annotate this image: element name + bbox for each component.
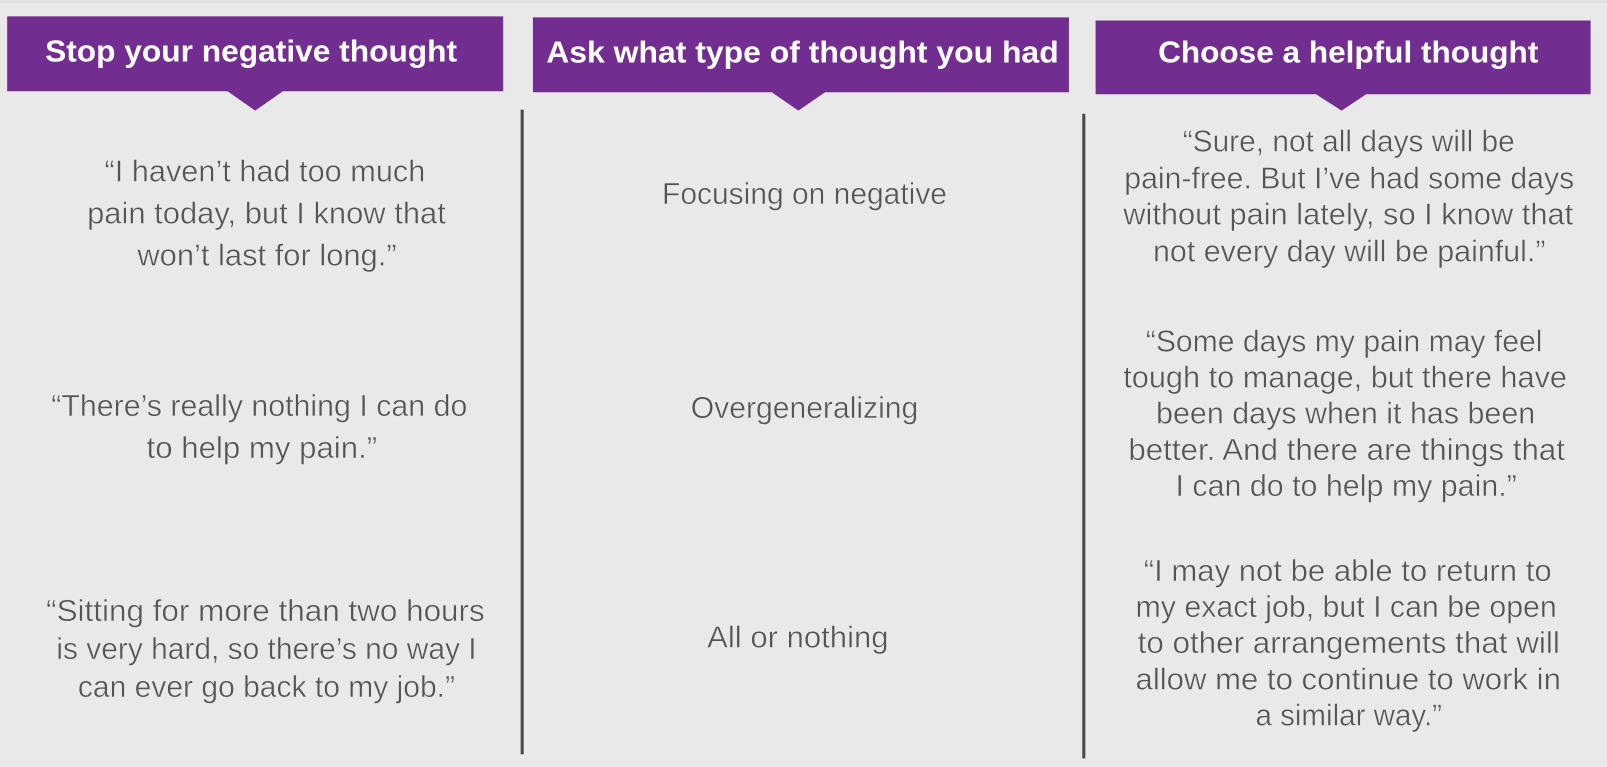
negative thought 2: “There’s really nothing I can do — [51, 388, 467, 423]
negative thought 3: is very hard, so there’s no way I — [56, 631, 477, 666]
helpful thought 3: allow me to continue to work in — [1136, 662, 1561, 697]
helpful thought 3: a similar way.” — [1255, 698, 1442, 733]
header: stop your negative thought: Stop your negative thought — [45, 33, 457, 68]
column divider left — [521, 110, 524, 754]
helpful thought 1: not every day will be painful.” — [1153, 233, 1546, 268]
helpful thought 3: “I may not be able to return to — [1144, 553, 1552, 588]
negative thought 2 — [51, 388, 467, 465]
negative thought 1 — [87, 153, 446, 272]
thought type 1: Focusing on negative — [662, 176, 947, 211]
header: choose a helpful thought — [1096, 20, 1591, 111]
thought type 2: Overgeneralizing — [691, 390, 918, 425]
helpful thought 1: pain-free. But I’ve had some days — [1124, 161, 1574, 196]
helpful thought 3 — [1136, 553, 1561, 733]
helpful thought 2: better. And there are things that — [1128, 432, 1565, 467]
header: choose a helpful thought: Choose a helpful thought — [1158, 35, 1538, 70]
negative thought 1: pain today, but I know that — [87, 195, 446, 230]
helpful thought 2: “Some days my pain may feel — [1146, 324, 1542, 359]
negative thought 1: won’t last for long.” — [136, 237, 397, 272]
column divider right — [1082, 114, 1085, 758]
helpful thought 2: tough to manage, but there have — [1123, 359, 1567, 394]
helpful thought 2: I can do to help my pain.” — [1176, 468, 1517, 503]
thought type 3: All or nothing — [707, 620, 889, 655]
negative thought 1: “I haven’t had too much — [105, 153, 425, 188]
helpful thought 1: without pain lately, so I know that — [1122, 196, 1574, 231]
helpful thought 3: to other arrangements that will — [1138, 625, 1560, 660]
header: stop your negative thought — [7, 16, 503, 111]
helpful thought 1: “Sure, not all days will be — [1183, 124, 1515, 159]
negative thought 3: can ever go back to my job.” — [78, 669, 455, 704]
helpful thought 2 — [1123, 324, 1567, 503]
negative thought 2: to help my pain.” — [147, 430, 377, 465]
helpful thought 2: been days when it has been — [1156, 395, 1535, 430]
negative thought 3 — [46, 593, 485, 704]
helpful thought 3: my exact job, but I can be open — [1136, 589, 1557, 624]
header: ask what type of thought you had: Ask what type of thought you had — [546, 35, 1059, 70]
negative thought 3: “Sitting for more than two hours — [46, 593, 485, 628]
helpful thought 1 — [1122, 124, 1574, 268]
header: ask what type of thought you had — [533, 17, 1069, 111]
